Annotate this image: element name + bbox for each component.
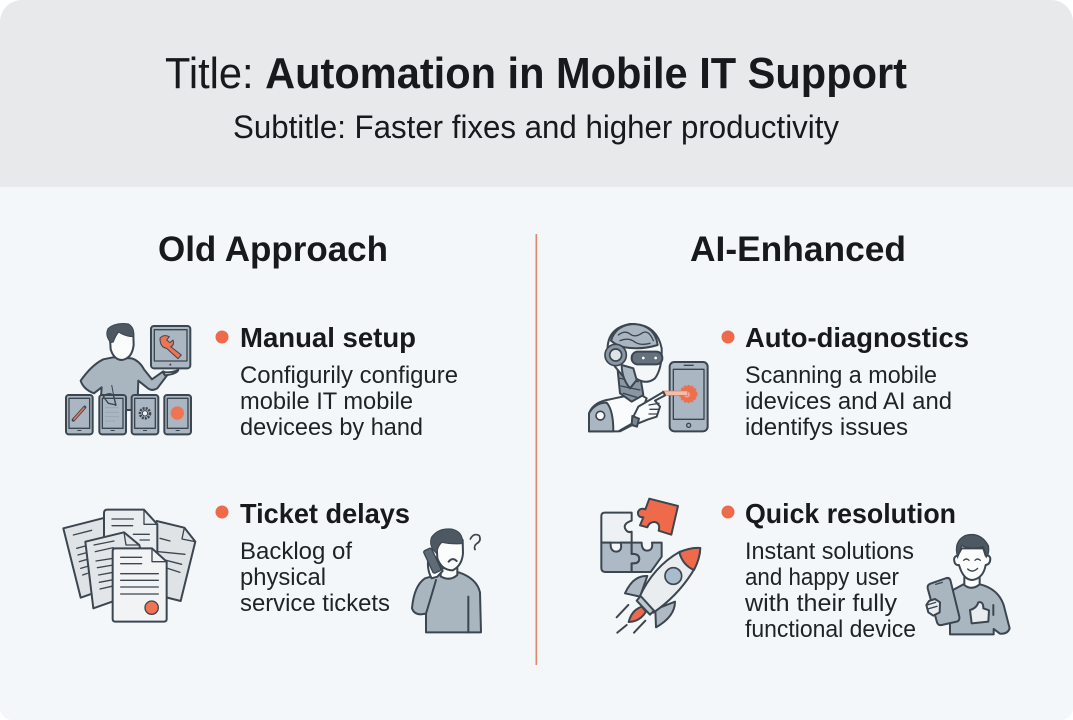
item: ticket delays xyxy=(216,498,410,617)
icon: puzzle and rocket xyxy=(601,499,700,633)
item text: Scanning a mobile xyxy=(745,362,937,389)
item text: and happy user xyxy=(745,564,899,591)
title: Title: Automation in Mobile IT Support xyxy=(165,49,907,98)
item text: Instant solutions xyxy=(745,538,914,565)
item text xyxy=(744,538,916,643)
item text: idevices and AI and xyxy=(745,388,952,415)
panel: old approach xyxy=(63,230,481,632)
item heading: Ticket delays xyxy=(240,498,410,529)
icon: worried person on phone xyxy=(412,529,481,632)
panel: ai-enhanced xyxy=(589,230,1010,643)
item: quick resolution xyxy=(722,498,956,643)
icon: technician configuring devices xyxy=(66,324,191,434)
bullet xyxy=(722,506,734,518)
icon: robot diagnosing phone xyxy=(589,324,708,431)
heading: ai-enhanced: AI-Enhanced xyxy=(690,230,906,269)
divider xyxy=(536,234,537,665)
item text: mobile IT mobile xyxy=(240,388,413,415)
item heading: Quick resolution xyxy=(745,498,956,529)
item text: identifys issues xyxy=(745,414,908,441)
item text: with their fully xyxy=(744,590,897,617)
bullet xyxy=(722,330,734,344)
item text xyxy=(240,362,458,441)
heading: old approach: Old Approach xyxy=(158,230,388,269)
item text xyxy=(240,538,390,617)
bullet xyxy=(216,330,228,344)
item text: Backlog of xyxy=(240,538,352,565)
icon: happy user with phone xyxy=(926,535,1010,634)
item text: Configurily configure xyxy=(240,362,458,389)
item heading: Manual setup xyxy=(240,322,416,353)
item heading: Auto-diagnostics xyxy=(745,322,969,353)
item text: physical xyxy=(240,564,326,591)
item text: devicees by hand xyxy=(240,414,423,441)
item text: functional device xyxy=(745,616,916,643)
item: auto-diagnostics xyxy=(722,322,969,441)
icon: paper stack xyxy=(63,510,195,622)
item text xyxy=(745,362,952,441)
subtitle: Subtitle: Faster fixes and higher productivity xyxy=(233,109,839,145)
item text: service tickets xyxy=(240,590,390,617)
bullet xyxy=(216,506,228,518)
item: manual setup xyxy=(216,322,458,441)
